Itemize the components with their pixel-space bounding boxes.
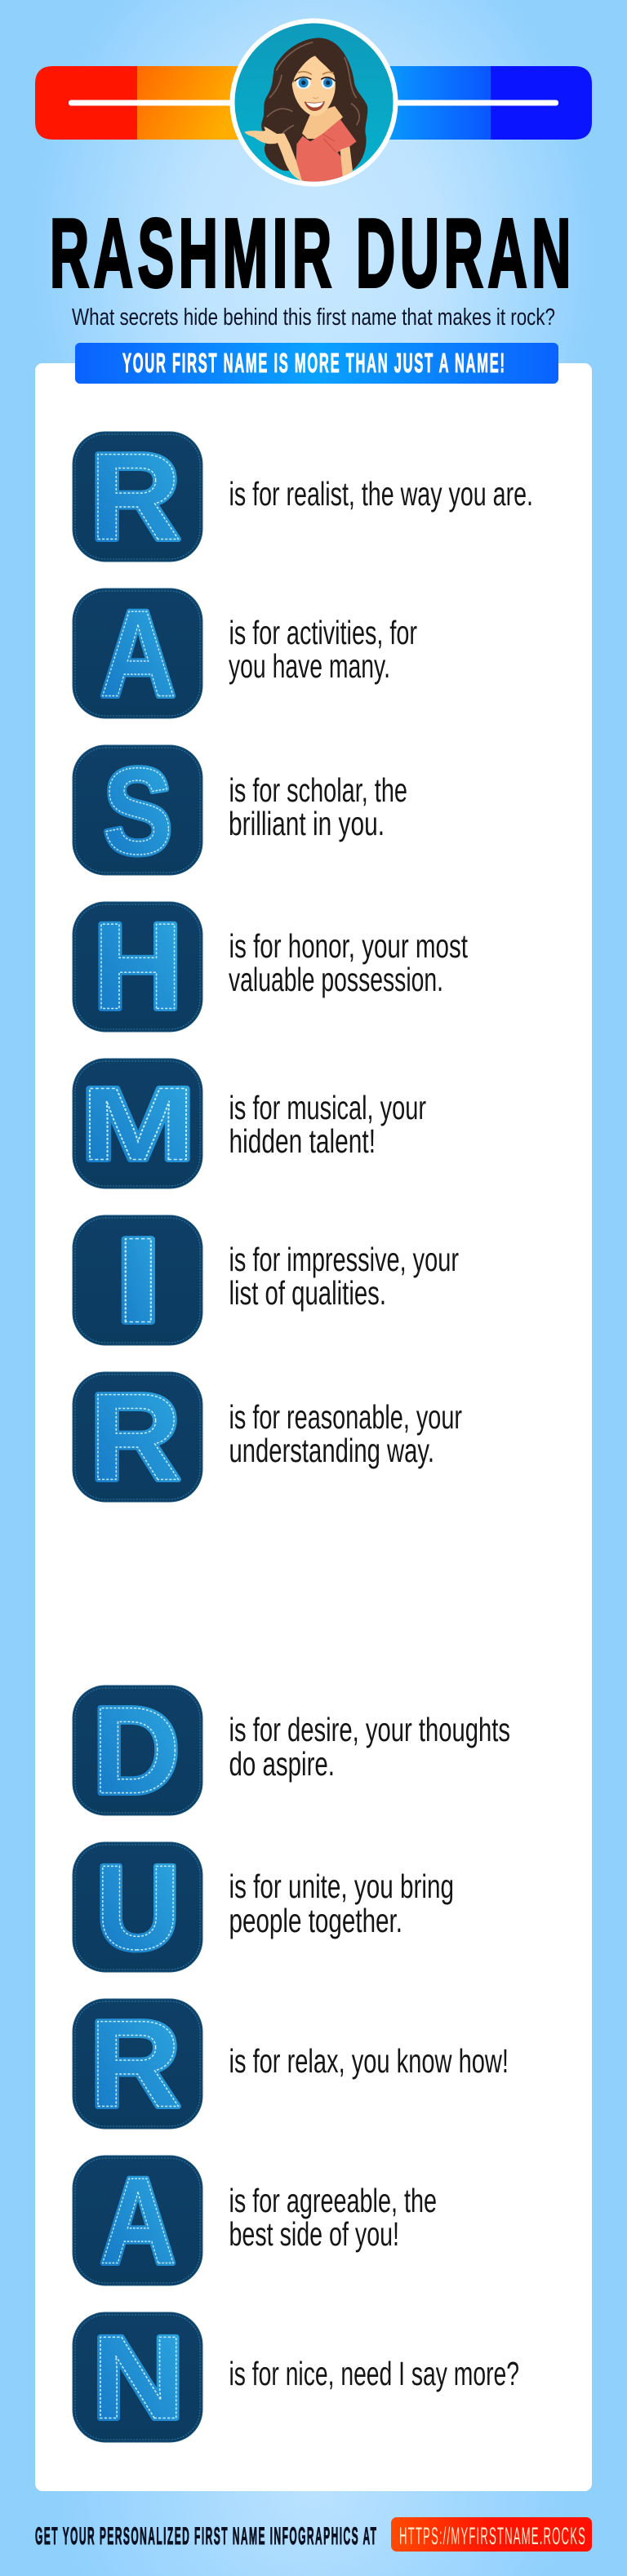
icon: letter R: R <box>90 1995 181 2132</box>
text: activities <box>229 614 417 685</box>
icon: letter S: S <box>103 743 172 880</box>
header colour bar <box>35 66 592 140</box>
woman illustration <box>244 38 367 182</box>
row: A activities <box>73 584 417 722</box>
text: relax: is for relax, you know how! <box>229 2042 509 2080</box>
row: I impressive <box>73 1213 459 1348</box>
icon: letter D <box>73 1681 202 1819</box>
text: activities: is for activities, for <box>229 614 417 651</box>
row: A agreeable <box>73 2152 437 2289</box>
text: reasonable <box>229 1398 462 1469</box>
text: unite <box>229 1868 454 1939</box>
text: agreeable: is for agreeable, the <box>229 2182 437 2219</box>
white content panel <box>35 363 592 2491</box>
icon: letter I <box>73 1213 202 1348</box>
icon: letter A: A <box>100 2152 176 2289</box>
text: reasonable: understanding way. <box>229 1432 434 1469</box>
text: unite: people together. <box>229 1902 402 1939</box>
icon: letter R <box>73 428 202 565</box>
icon: letter U: U <box>96 1841 180 1975</box>
icon: letter R <box>73 1368 202 1505</box>
icon: letter I: I <box>113 1213 162 1348</box>
icon: letter H: H <box>93 898 183 1035</box>
icon: letter S <box>73 743 202 880</box>
icon: letter A: A <box>100 2152 176 2289</box>
icon: letter R <box>73 1995 202 2132</box>
icon: letter R: R <box>90 428 181 565</box>
icon: letter A <box>73 2152 202 2289</box>
icon: letter N: N <box>91 2312 185 2444</box>
row: M musical <box>73 1059 426 1188</box>
icon: letter M: M <box>81 1066 195 1182</box>
icon: letter I: I <box>113 1213 162 1348</box>
banner <box>75 343 558 384</box>
icon: letter R: R <box>90 1368 181 1505</box>
icon: letter D: D <box>92 1681 180 1819</box>
icon: letter R: R <box>90 428 181 565</box>
text: impressive: is for impressive, your <box>229 1241 459 1278</box>
row: R realist <box>73 428 533 565</box>
icon: letter R: R <box>90 1995 181 2132</box>
row: R reasonable <box>73 1368 462 1505</box>
text: desire <box>229 1711 510 1783</box>
text: reasonable: is for reasonable, your <box>229 1398 462 1436</box>
icon: letter M: M <box>81 1066 195 1182</box>
text: scholar: brilliant in you. <box>229 805 385 842</box>
icon: letter H <box>73 898 202 1035</box>
text: activities: you have many. <box>229 647 390 685</box>
icon: letter S: S <box>103 743 172 880</box>
text: honor: valuable possession. <box>229 961 443 998</box>
icon: letter M <box>73 1059 202 1188</box>
text: desire: do aspire. <box>229 1745 335 1783</box>
text: impressive <box>229 1241 459 1312</box>
text: unite: is for unite, you bring <box>229 1868 454 1905</box>
row: N nice <box>73 2312 519 2444</box>
icon: letter N <box>73 2312 202 2444</box>
text: agreeable: best side of you! <box>229 2215 399 2253</box>
text: impressive: list of qualities. <box>229 1274 386 1312</box>
icon: letter U: U <box>96 1841 180 1975</box>
text: desire: is for desire, your thoughts <box>229 1711 510 1748</box>
icon: letter R: R <box>90 1368 181 1505</box>
footer url button: HTTPS://MYFIRSTNAME.ROCKS <box>399 2522 585 2549</box>
text: scholar: is for scholar, the <box>229 771 407 809</box>
row: U unite <box>73 1841 454 1975</box>
text: honor: is for honor, your most <box>229 927 468 965</box>
icon: letter A: A <box>100 584 176 722</box>
icon: letter A <box>73 584 202 722</box>
icon: letter H: H <box>93 898 183 1035</box>
text: honor <box>229 927 468 998</box>
row: D desire <box>73 1681 510 1819</box>
text: musical <box>229 1089 426 1160</box>
icon: letter A: A <box>100 584 176 722</box>
text: musical: is for musical, your <box>229 1089 426 1126</box>
icon: letter D: D <box>92 1681 180 1819</box>
footer call to action: GET YOUR PERSONALIZED FIRST NAME INFOGRAPHICS AT <box>35 2521 376 2550</box>
icon: letter U <box>73 1841 202 1975</box>
portrait medallion <box>230 18 398 186</box>
text: scholar <box>229 771 407 842</box>
title: RASHMIR DURAN <box>50 200 571 308</box>
banner: YOUR FIRST NAME IS MORE THAN JUST A NAME! <box>122 348 505 379</box>
text: agreeable <box>229 2182 437 2253</box>
row: R relax <box>73 1995 509 2132</box>
text: musical: hidden talent! <box>229 1122 376 1160</box>
icon: letter N: N <box>91 2312 185 2444</box>
row: S scholar <box>73 743 407 880</box>
row: H honor <box>73 898 468 1035</box>
